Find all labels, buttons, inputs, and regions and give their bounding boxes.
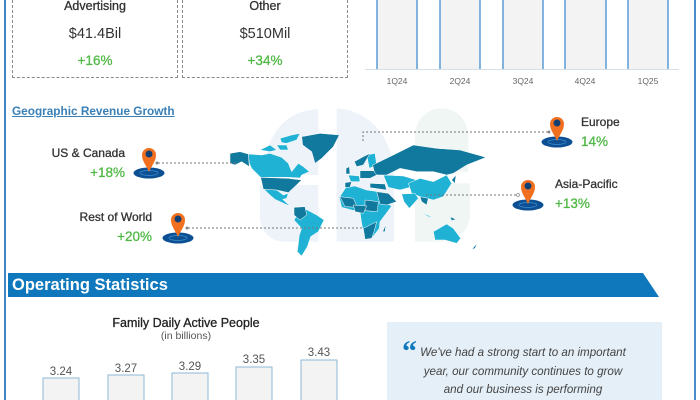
region name: Asia-Pacific [555, 177, 618, 191]
countries dark [230, 133, 486, 249]
advertising value: $41.4Bil [69, 26, 121, 42]
region name: Europe [581, 115, 620, 129]
advertising growth: +16% [78, 53, 112, 68]
world map [230, 108, 486, 256]
chart: family daily active people: 3.43 [308, 347, 330, 359]
region growth: +18% [90, 165, 125, 180]
pin: Rest of World [162, 213, 363, 244]
bar chart: quarterly: 4Q24 [575, 76, 596, 86]
quote text [420, 346, 626, 396]
region name: US & Canada [52, 146, 125, 160]
pin: Europe [363, 117, 572, 148]
bar chart: quarterly: 2Q24 [450, 76, 471, 86]
callout: Europe [581, 115, 620, 149]
panel: quote [387, 322, 662, 400]
callout: Rest of World [80, 210, 152, 244]
bar chart: quarterly: 1Q24 [387, 76, 408, 86]
panel: advertising revenue [12, 0, 178, 78]
bar chart: quarterly: 3Q24 [513, 76, 534, 86]
quote mark: “ [402, 335, 417, 368]
quote text: year, our community continues to grow [424, 364, 622, 378]
pin: Asia-Pacific [426, 180, 544, 210]
bar chart: quarterly: 1Q25 [638, 76, 659, 86]
chart: family daily active people: 3.27 [115, 363, 137, 375]
chart: family daily active people: 3.29 [179, 361, 201, 373]
callout: Asia-Pacific [554, 177, 618, 211]
pin: US & Canada [134, 148, 238, 178]
quote text: We've had a strong start to an important [420, 346, 626, 359]
watermark shapes [260, 108, 470, 242]
panel: other revenue [182, 0, 348, 78]
chart: family daily active people: 3.35 [243, 354, 265, 366]
chart subtitle: (in billions) [161, 330, 211, 342]
heading: geographic revenue growth: Geographic Revenue Growth [12, 104, 175, 118]
region growth: +13% [555, 196, 590, 211]
chart: family daily active people: 3.24 [50, 366, 73, 378]
chart: family daily active people [42, 316, 338, 400]
region name: Rest of World [80, 210, 152, 224]
banner title: Operating Statistics [12, 276, 168, 294]
region growth: +20% [117, 229, 152, 244]
countries light [248, 133, 461, 256]
section banner: operating statistics [8, 273, 659, 297]
chart title: Family Daily Active People [112, 316, 260, 330]
callout: US & Canada [52, 146, 126, 180]
other growth: +34% [248, 53, 282, 68]
other value: $510Mil [240, 26, 290, 42]
quote text: and our business is performing [444, 383, 602, 396]
region growth: 14% [581, 134, 608, 149]
bar chart: quarterly [365, 0, 679, 86]
map pins and connectors [134, 117, 572, 244]
